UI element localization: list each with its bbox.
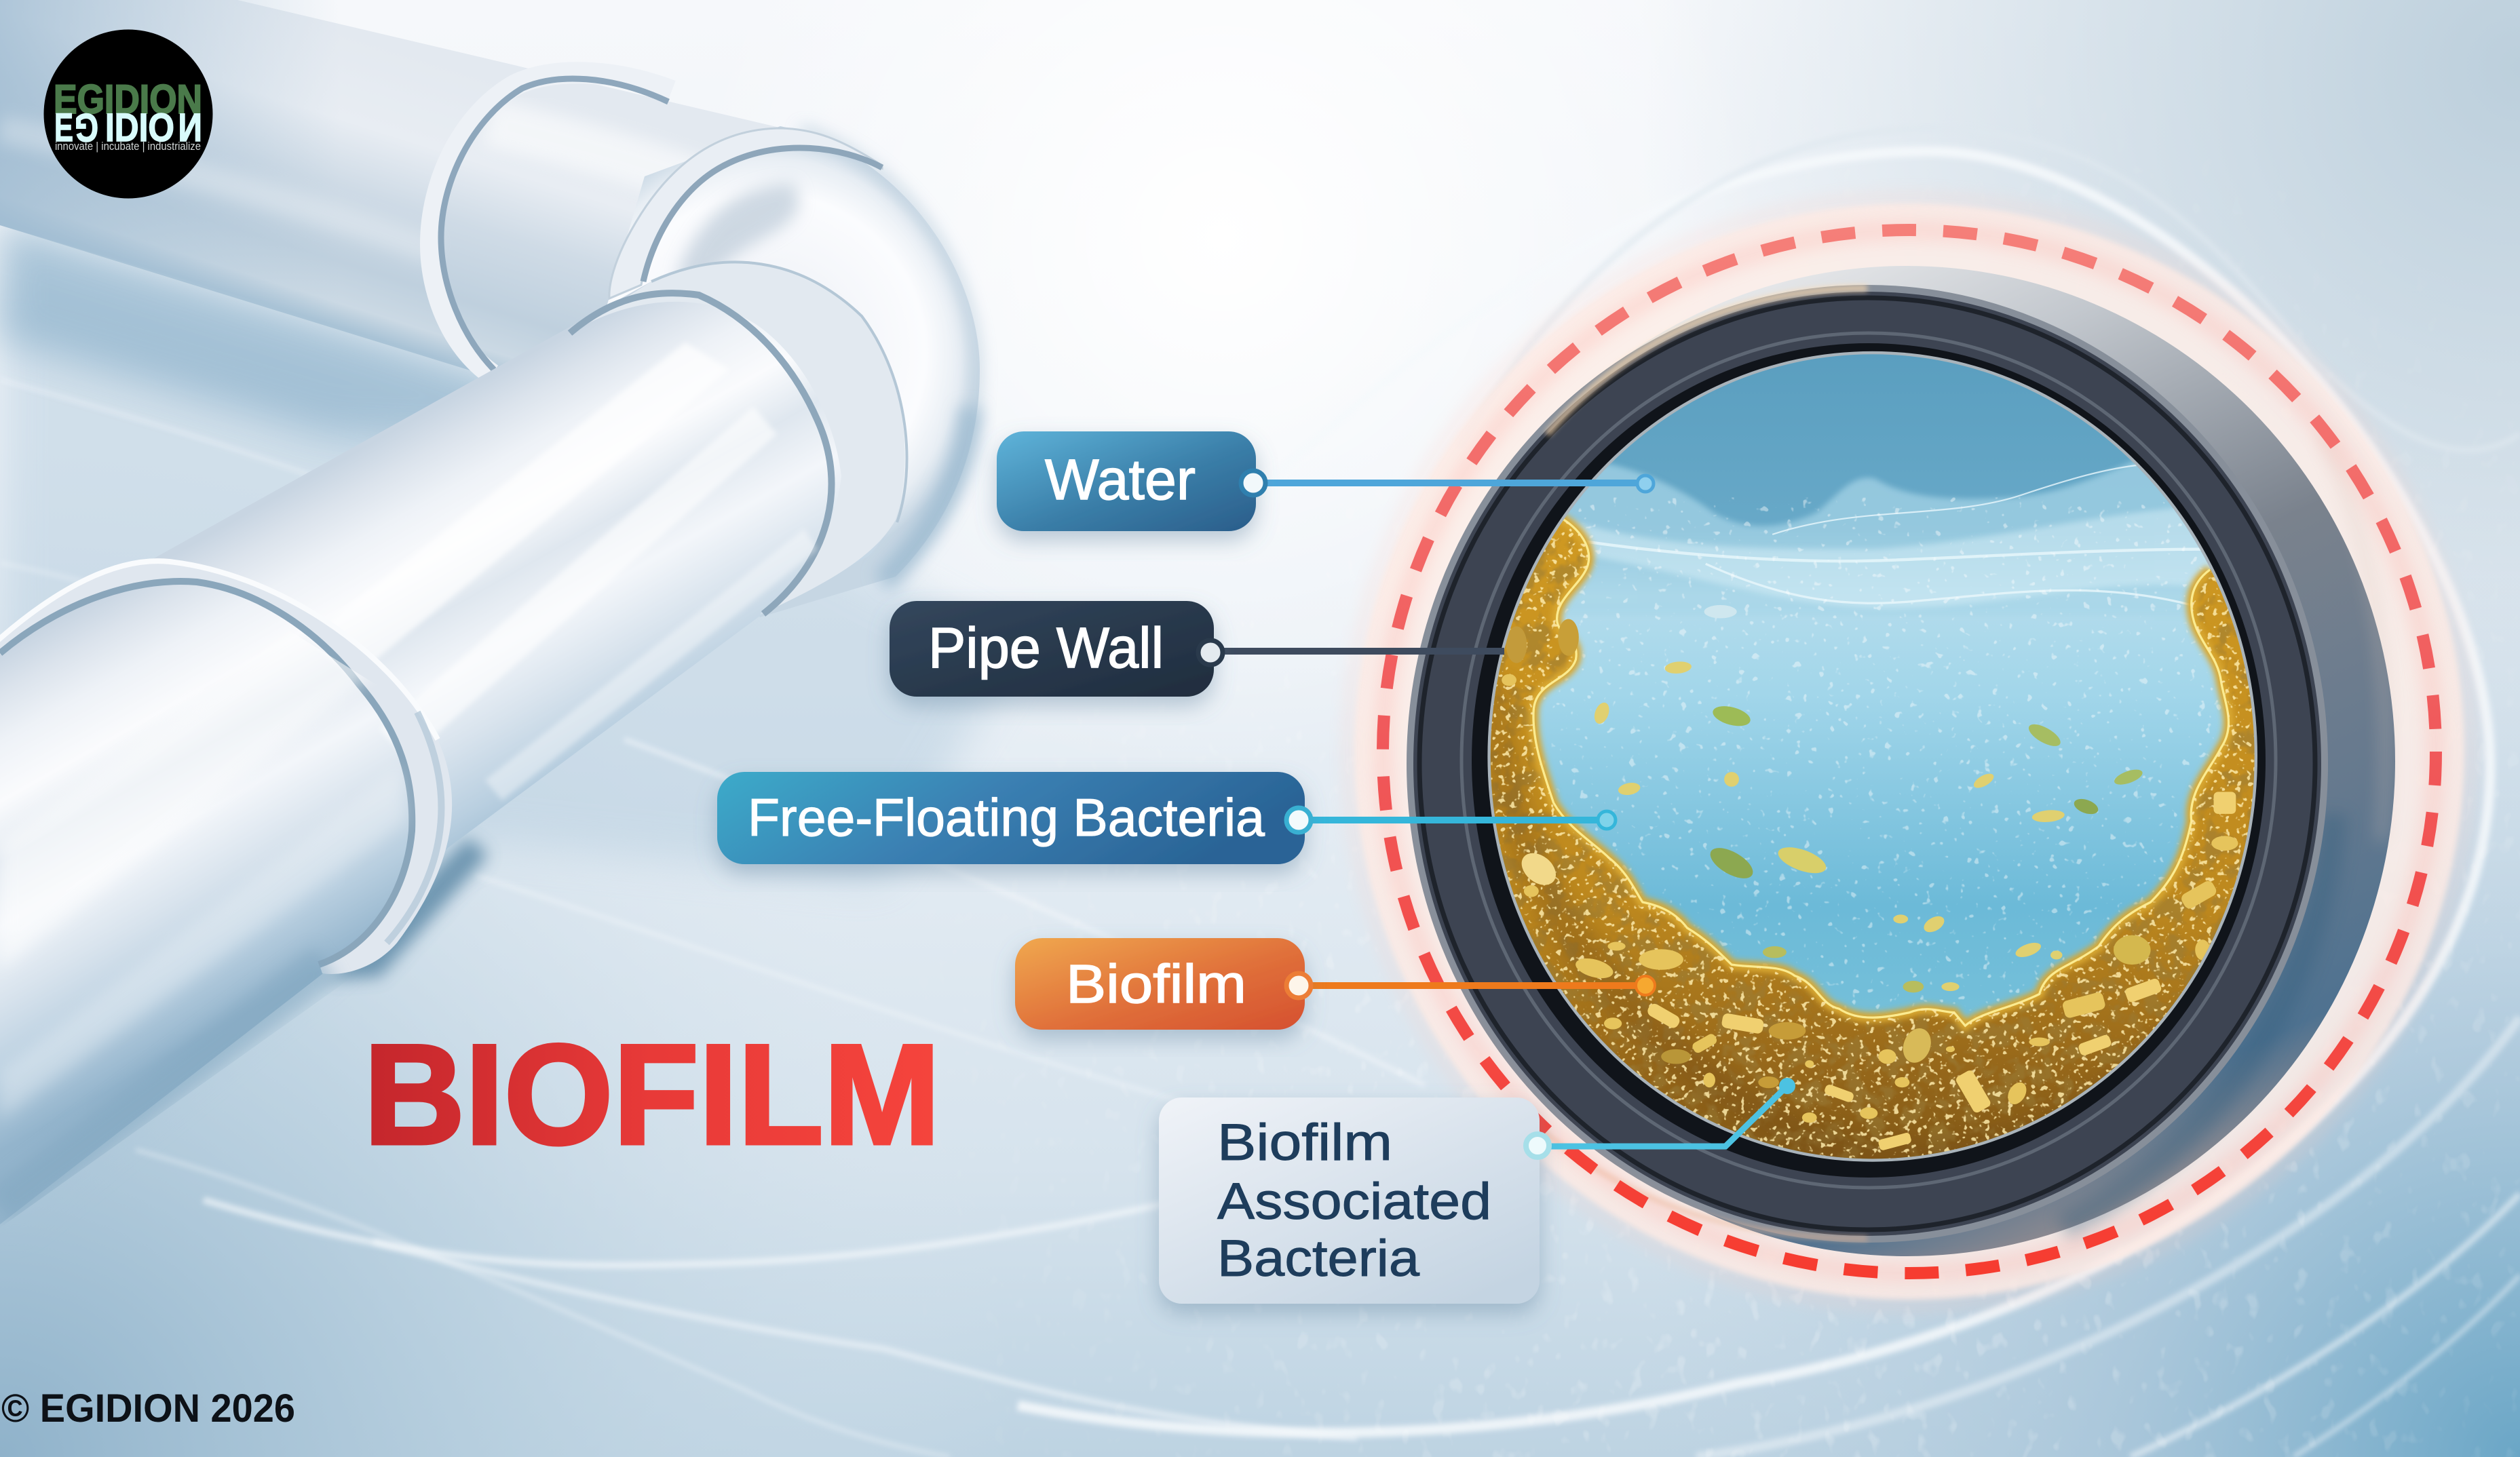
biofilm associated bacteria particles	[1502, 619, 2238, 1151]
halo around the pipe	[1354, 203, 2464, 1300]
label: Pipe Wall	[890, 601, 1504, 697]
wave surface	[1506, 457, 2247, 615]
logo: EGIDION: N	[178, 106, 202, 150]
label: Pipe Wall: Pipe Wall	[928, 616, 1164, 680]
upper pipe section	[0, 0, 814, 407]
biofilm layer	[1453, 483, 2291, 1189]
water and biofilm window	[1487, 351, 2257, 1162]
pipe cross-section	[1349, 198, 2470, 1305]
collar on lower pipe	[0, 561, 452, 974]
biofilm gold specks	[1483, 498, 2262, 1167]
label: Biofilm Associated Bacteria: Bacteria	[1217, 1230, 1420, 1287]
logo: EGIDION: innovate | incubate | industrialize	[55, 140, 201, 153]
logo: EGIDION: E	[54, 106, 73, 150]
logo: EGIDION	[43, 30, 213, 198]
lower pipe section	[0, 597, 407, 1207]
logo: EGIDION: IDIO	[105, 106, 174, 150]
label: Biofilm	[1015, 938, 1655, 1030]
label: Biofilm Associated Bacteria: Associated	[1217, 1173, 1491, 1230]
dark pipe wall ring	[1410, 288, 2325, 1239]
label: Biofilm: Biofilm	[1066, 954, 1246, 1014]
elbow	[597, 126, 980, 617]
shadow under the lower pipe	[326, 838, 489, 980]
title: BIOFILM: BIOFILM	[364, 1015, 940, 1174]
free-floating bacteria	[1592, 605, 2144, 992]
logo: EGIDION: G	[75, 105, 98, 149]
label: Free-Floating Bacteria	[717, 772, 1616, 864]
main diagonal pipe	[0, 261, 907, 1228]
label: Water	[997, 431, 1654, 531]
logo: EGIDION: EGIDION	[54, 77, 202, 122]
metal pipe body	[1418, 266, 2395, 1256]
shadow under the upper pipe	[0, 220, 584, 448]
label: Biofilm Associated Bacteria: Biofilm	[1217, 1114, 1392, 1171]
copyright: © EGIDION 2026	[1, 1386, 295, 1431]
label: Biofilm Associated Bacteria	[1159, 1078, 1795, 1304]
label: Water: Water	[1045, 448, 1196, 511]
pipe assembly	[0, 0, 980, 1228]
water	[1483, 351, 2262, 1167]
outer wall glints	[2321, 434, 2386, 841]
dashed red boundary	[1383, 230, 2436, 1273]
label: Free-Floating Bacteria: Free-Floating Bacteria	[748, 788, 1265, 847]
